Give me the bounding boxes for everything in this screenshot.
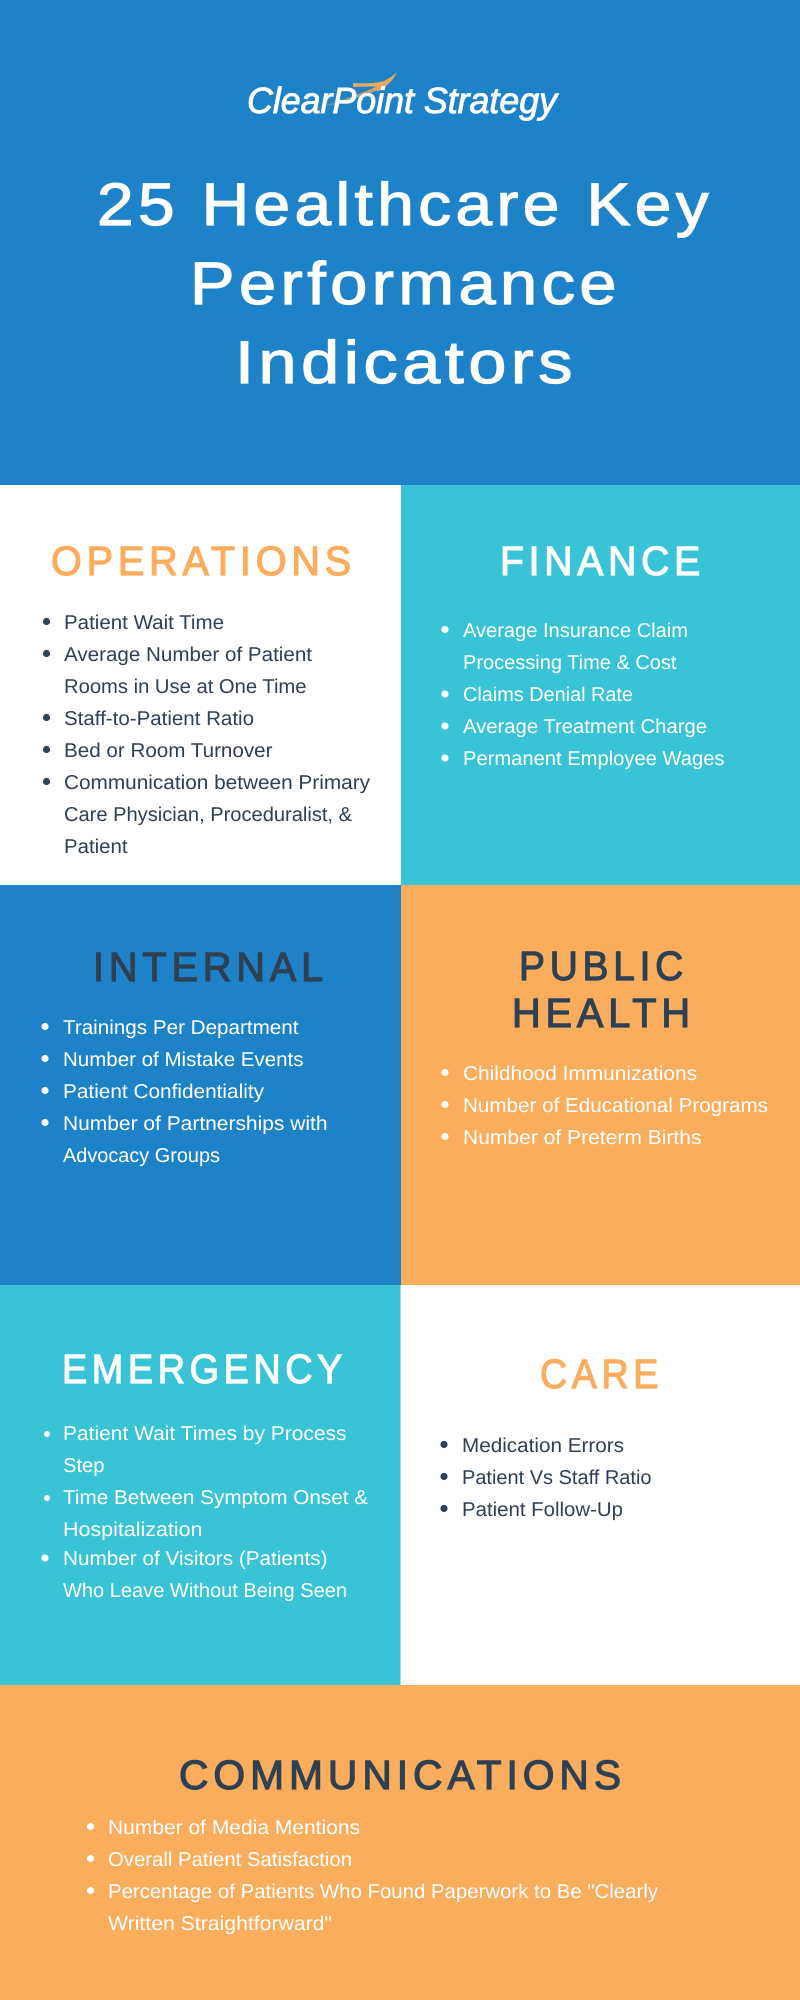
- heading: public health: PUBLIC: [519, 943, 688, 989]
- logo: ClearPoint Strategy: ClearPoint Strategy: [247, 80, 560, 121]
- list: operations KPIs: Bed or Room Turnover: [64, 740, 273, 762]
- list: operations KPIs: Care Physician, Proceduralist, &: [64, 804, 353, 826]
- list: finance KPIs: Permanent Employee Wages: [463, 748, 724, 770]
- list: internal KPIs: Trainings Per Department: [63, 1017, 299, 1039]
- list: emergency KPIs: [41, 1423, 369, 1602]
- list: internal KPIs: Patient Confidentiality: [63, 1081, 264, 1103]
- panel: emergency: [0, 1285, 400, 1685]
- list: emergency KPIs: Who Leave Without Being Seen: [63, 1580, 347, 1602]
- list: public health KPIs: Childhood Immunizations: [463, 1063, 697, 1085]
- list: operations KPIs: [43, 612, 370, 858]
- list: emergency KPIs: Time Between Symptom Onset &: [63, 1487, 369, 1509]
- heading: public health: HEALTH: [512, 990, 695, 1036]
- panel: internal: [0, 885, 401, 1285]
- heading: finance: FINANCE: [500, 538, 705, 584]
- heading: public health: [512, 943, 695, 1036]
- panel: operations: [0, 485, 401, 885]
- list: finance KPIs: Claims Denial Rate: [463, 684, 633, 706]
- list: finance KPIs: Average Insurance Claim: [463, 620, 688, 642]
- list: care KPIs: Medication Errors: [462, 1435, 624, 1457]
- list: operations KPIs: Patient: [64, 836, 128, 858]
- title: [97, 171, 713, 396]
- list: internal KPIs: Advocacy Groups: [63, 1145, 220, 1167]
- list: operations KPIs: Rooms in Use at One Time: [64, 676, 306, 698]
- list: care KPIs: Patient Follow-Up: [462, 1499, 623, 1521]
- list: public health KPIs: Number of Educational Programs: [463, 1095, 768, 1117]
- list: public health KPIs: [441, 1063, 768, 1149]
- list: finance KPIs: [441, 620, 724, 770]
- list: operations KPIs: Average Number of Patient: [64, 644, 312, 666]
- list: internal KPIs: [41, 1017, 328, 1167]
- list: operations KPIs: Staff-to-Patient Ratio: [64, 708, 254, 730]
- list: operations KPIs: Patient Wait Time: [64, 612, 224, 634]
- panel: header: [0, 0, 800, 485]
- list: communications KPIs: Written Straightforward": [108, 1913, 332, 1935]
- heading: operations: OPERATIONS: [51, 538, 356, 584]
- list: emergency KPIs: Hospitalization: [63, 1519, 202, 1541]
- list: finance KPIs: Processing Time & Cost: [463, 652, 677, 674]
- list: public health KPIs: Number of Preterm Births: [463, 1127, 702, 1149]
- panel: public health: [401, 885, 800, 1285]
- heading: care: CARE: [540, 1351, 663, 1397]
- list: internal KPIs: Number of Partnerships with: [63, 1113, 328, 1135]
- heading: internal: INTERNAL: [93, 944, 328, 990]
- list: communications KPIs: Number of Media Mentions: [108, 1817, 360, 1839]
- heading: communications: COMMUNICATIONS: [179, 1752, 626, 1798]
- panel: communications: [0, 1685, 800, 2000]
- title: Indicators: [235, 329, 577, 396]
- panel: finance: [401, 485, 800, 885]
- list: communications KPIs: Overall Patient Satisfaction: [108, 1849, 352, 1871]
- list: communications KPIs: Percentage of Patients Who Found Paperwork to Be "Clearly: [108, 1881, 658, 1903]
- list: care KPIs: [440, 1435, 652, 1521]
- list: operations KPIs: Communication between Primary: [64, 772, 370, 794]
- list: communications KPIs: [87, 1817, 658, 1935]
- panel: care: [400, 1285, 800, 1685]
- list: care KPIs: Patient Vs Staff Ratio: [462, 1467, 652, 1489]
- list: finance KPIs: Average Treatment Charge: [463, 716, 707, 738]
- list: internal KPIs: Number of Mistake Events: [63, 1049, 304, 1071]
- icon: logo arrow swoosh: [312, 72, 397, 110]
- list: emergency KPIs: Patient Wait Times by Process: [63, 1423, 346, 1445]
- heading: emergency: EMERGENCY: [62, 1346, 347, 1392]
- title: Performance: [190, 250, 621, 317]
- list: emergency KPIs: Number of Visitors (Patients): [63, 1548, 328, 1570]
- title: 25 Healthcare Key: [97, 171, 713, 238]
- list: emergency KPIs: Step: [63, 1455, 104, 1477]
